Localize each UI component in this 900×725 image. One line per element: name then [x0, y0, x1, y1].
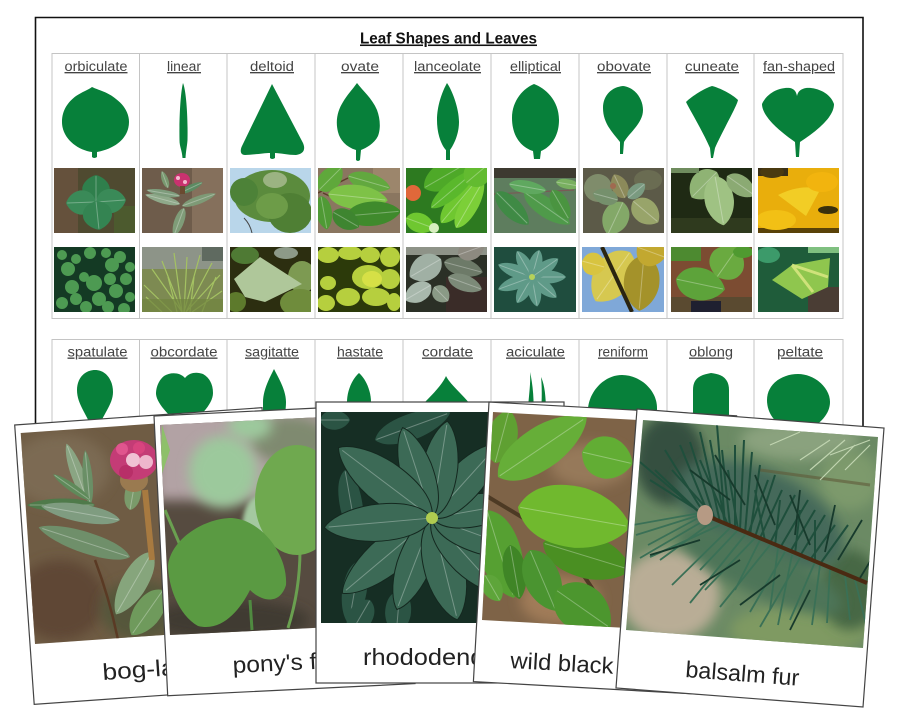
label: orbiculate: orbiculate: [64, 59, 128, 74]
icon: linear leaf: [179, 83, 188, 158]
caption: rhododendron: rhododendron: [363, 644, 521, 670]
icon: obovate leaf: [603, 86, 643, 154]
caption: wild black cherry: wild black cherry: [509, 647, 687, 683]
icon: cordate leaf: [420, 376, 472, 425]
icon: orbiculate leaf: [62, 87, 129, 158]
icon: reniform leaf: [588, 375, 657, 425]
photo: ginkgo leaf: [758, 247, 839, 312]
card: balsalm fur: [616, 409, 884, 707]
photo: rhododendron rosette: [321, 412, 488, 623]
photo: lanceolate bright leaves with orange flower: [406, 168, 487, 233]
icon: hastate leaf: [347, 373, 371, 425]
photo: floating round leaves: [54, 247, 135, 312]
photo: pine branch: [620, 415, 882, 655]
label: spatulate: spatulate: [68, 344, 128, 360]
photo: orbiculate plant: [54, 168, 135, 233]
photo: yellow-green foliage: [318, 247, 400, 312]
icon: cuneate leaf: [686, 86, 738, 158]
title: Leaf Shapes and Leaves: [360, 30, 537, 48]
icon: aciculate leaves: [528, 372, 546, 412]
photo: grass: [142, 247, 223, 312]
photo: oak leaves: [671, 247, 752, 312]
label: obovate: obovate: [597, 59, 651, 74]
label: elliptical: elliptical: [510, 59, 561, 74]
icon: lanceolate leaf: [437, 83, 459, 160]
panel: leaf shapes table top: [52, 54, 843, 318]
icon: spatulate leaf: [77, 370, 113, 430]
photo: dark lanceolate foliage: [406, 247, 487, 312]
photo: ovate leaves: [318, 168, 400, 233]
caption: pony's foot: pony's foot: [232, 646, 352, 678]
icon: oblong leaf: [693, 373, 729, 425]
sheet frame: [36, 18, 863, 435]
photo: linear plant with pink flower: [142, 168, 223, 233]
photo: fan-shaped yellow foliage: [758, 168, 839, 233]
label: fan-shaped: fan-shaped: [763, 59, 835, 74]
photo: wild black cherry leaves: [482, 412, 636, 628]
label: lanceolate: lanceolate: [414, 59, 481, 74]
card: pony's foot: [150, 404, 415, 696]
label: sagitatte: sagitatte: [245, 344, 299, 360]
photo: rhododendron rosette thumbnail: [494, 247, 576, 312]
label: linear: linear: [167, 59, 202, 74]
photo: elliptical branch: [494, 168, 576, 233]
label: hastate: hastate: [337, 344, 383, 360]
label: deltoid: deltoid: [250, 59, 294, 74]
icon: deltoid leaf: [241, 84, 304, 159]
caption: bog-laurel: bog-laurel: [102, 651, 220, 685]
photo: obovate leaves: [583, 168, 664, 233]
label: cordate: cordate: [422, 344, 473, 360]
photo: yellow obovate leaves against sky: [582, 247, 664, 312]
icon: ovate leaf: [337, 83, 380, 161]
label: cuneate: cuneate: [685, 59, 739, 74]
label: obcordate: obcordate: [150, 344, 218, 360]
icon: elliptical leaf: [512, 84, 559, 159]
icon: obcordate leaf: [156, 373, 213, 428]
photo: deltoid foliage: [230, 168, 311, 233]
panel: leaf shapes table bottom: [52, 340, 843, 430]
icon: fan-shaped leaf: [762, 88, 834, 157]
icon: sagittate leaf: [263, 369, 286, 425]
photo: pony's foot leaves: [160, 417, 316, 635]
card: bog-laurel: [10, 408, 282, 704]
icon: peltate leaf: [767, 374, 830, 430]
caption: balsalm fur: balsalm fur: [685, 656, 801, 691]
photo: bog-laurel plant: [20, 424, 164, 644]
label: oblong: oblong: [689, 344, 733, 360]
label: aciculate: aciculate: [506, 344, 565, 360]
card: wild black cherry: [467, 400, 737, 695]
label: reniform: reniform: [598, 344, 648, 360]
card: rhododendron: [316, 401, 564, 683]
photo: pale birch leaf: [230, 247, 311, 312]
label: peltate: peltate: [777, 344, 823, 360]
label: ovate: ovate: [341, 59, 379, 74]
photo: cuneate serrated leaves: [671, 168, 752, 233]
